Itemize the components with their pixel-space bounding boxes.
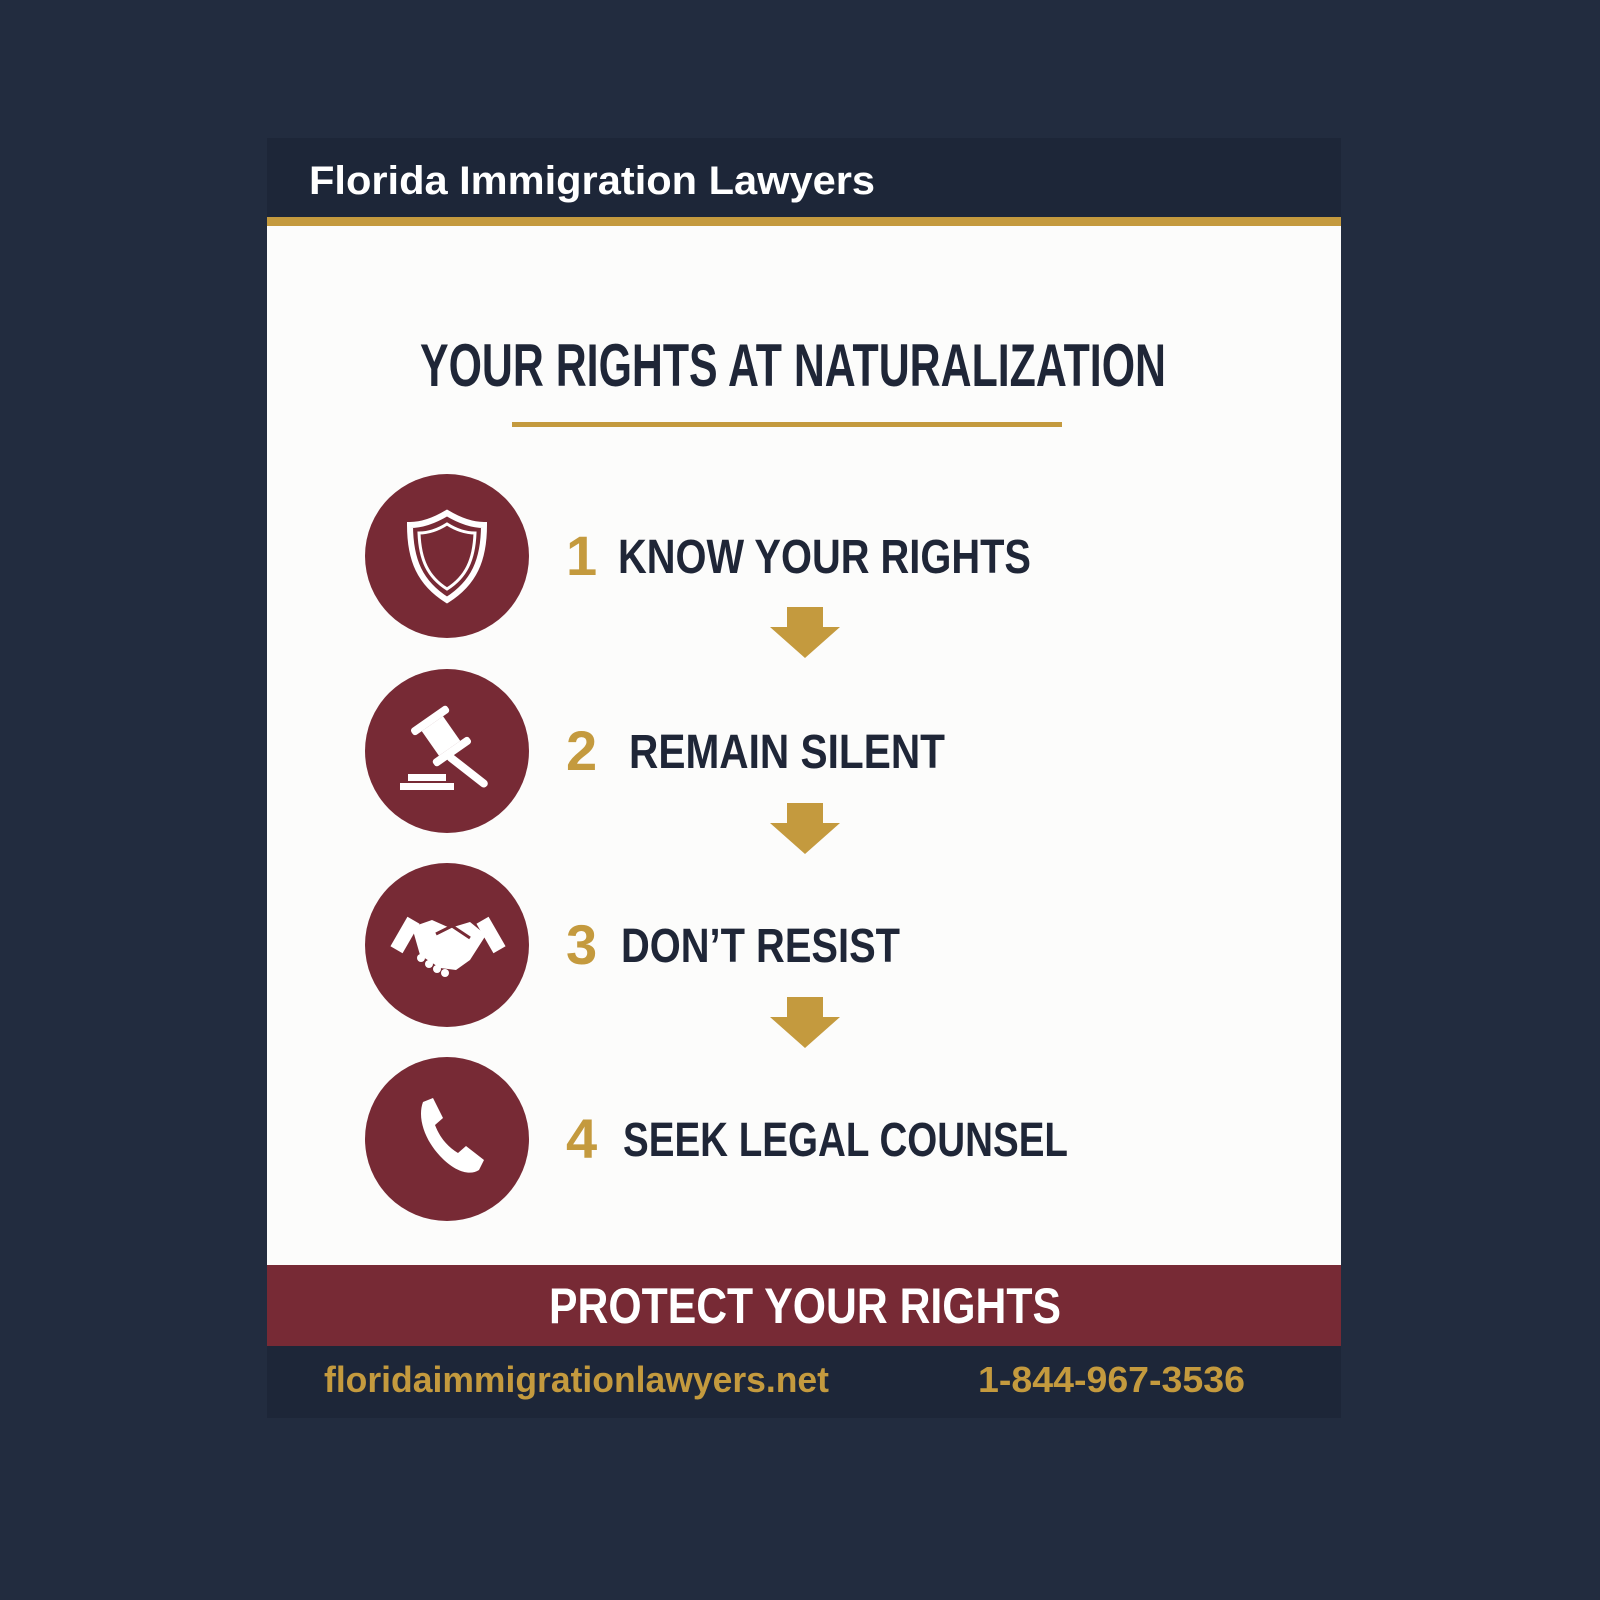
label: REMAIN SILENT — [629, 726, 945, 779]
title underline — [512, 422, 1062, 427]
icon: handshake — [365, 863, 529, 1027]
label: DON’T RESIST — [621, 920, 900, 973]
phone number: 1-844-967-3536 — [978, 1359, 1245, 1400]
arrow 3 — [770, 997, 840, 1048]
label: SEEK LEGAL COUNSEL — [623, 1114, 1068, 1167]
icon: shield — [365, 474, 529, 638]
panel: main card — [267, 138, 1341, 1418]
arrow 2 — [770, 803, 840, 854]
icon: phone — [365, 1057, 529, 1221]
footer: contact — [267, 1346, 1341, 1418]
arrow 1 — [770, 607, 840, 658]
number 1: 1 — [566, 524, 597, 587]
banner: protect your rights: PROTECT YOUR RIGHTS — [549, 1278, 1061, 1334]
step 2 — [365, 669, 945, 833]
step 1 — [365, 474, 1031, 638]
number 3: 3 — [566, 913, 597, 976]
website: floridaimmigrationlawyers.net — [324, 1359, 829, 1400]
number 4: 4 — [566, 1107, 597, 1170]
step 4 — [365, 1057, 1068, 1221]
header text: Florida Immigration Lawyers — [309, 159, 875, 203]
title: YOUR RIGHTS AT NATURALIZATION — [420, 332, 1166, 399]
header bar — [267, 138, 1341, 226]
step 3 — [365, 863, 900, 1027]
number 2: 2 — [566, 719, 597, 782]
label: KNOW YOUR RIGHTS — [618, 531, 1031, 584]
icon: gavel — [365, 669, 529, 833]
banner: protect your rights — [267, 1265, 1341, 1346]
